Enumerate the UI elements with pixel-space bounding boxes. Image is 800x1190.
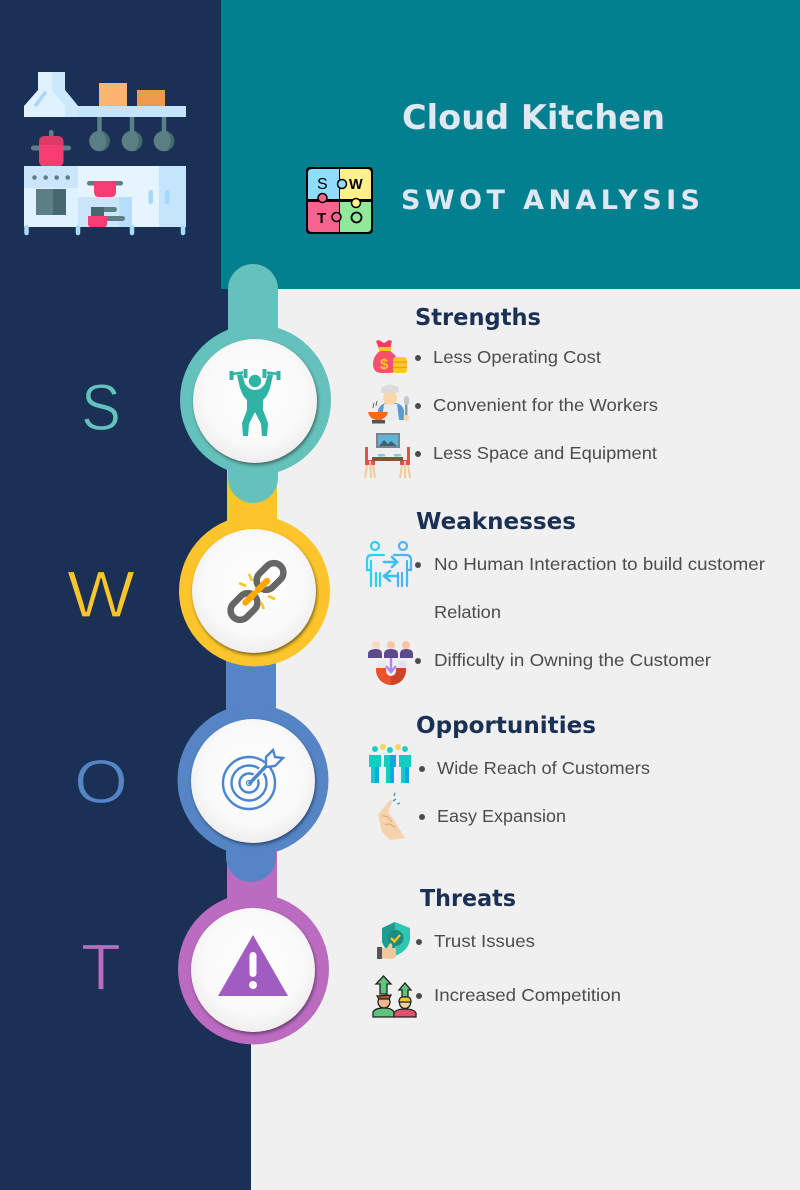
icon: SWOT puzzle: T xyxy=(317,210,326,227)
letter S: S xyxy=(81,370,121,444)
heading: weaknesses: Weaknesses xyxy=(416,509,576,535)
icon: SWOT puzzle: W xyxy=(349,177,363,193)
icon: trust shield xyxy=(377,922,410,959)
heading: opportunities: Opportunities xyxy=(416,713,596,739)
bullet text: increased competition: Increased Competition xyxy=(434,985,621,1005)
title: Cloud Kitchen xyxy=(402,98,665,138)
icon: target with dart xyxy=(223,750,283,809)
bullet text: wide reach: Wide Reach of Customers xyxy=(437,758,650,778)
icon: SWOT puzzle xyxy=(306,167,373,234)
panel: weaknesses xyxy=(367,509,765,685)
panel: opportunities xyxy=(369,713,650,840)
icon: chef xyxy=(368,384,410,424)
bullet text: convenient for the workers: Convenient for the Workers xyxy=(433,395,658,415)
icon: dining table xyxy=(365,433,410,478)
letter T: T xyxy=(81,930,121,1004)
heading: strengths: Strengths xyxy=(415,305,541,331)
panel: strengths xyxy=(365,305,658,478)
subtitle: SWOT ANALYSIS xyxy=(401,185,700,216)
bullet text: easy expansion: Easy Expansion xyxy=(437,806,566,826)
bullet text: trust issues: Trust Issues xyxy=(434,931,535,951)
icon: crowd of customers xyxy=(369,744,411,783)
timeline node: threats xyxy=(178,850,329,1044)
icon: SWOT puzzle: S xyxy=(317,176,328,193)
icon: competitors xyxy=(373,976,416,1017)
icon: money bag: $ xyxy=(380,356,389,373)
icon: finger snap xyxy=(378,793,405,840)
teal header panel xyxy=(221,0,800,289)
icon: warning triangle xyxy=(218,935,288,996)
bullet text: less operating cost: Less Operating Cost xyxy=(433,347,601,367)
icon: customer magnet xyxy=(368,641,413,685)
heading: threats: Threats xyxy=(420,886,516,912)
panel: threats xyxy=(373,886,621,1017)
icon: weightlifter xyxy=(230,369,280,436)
text: relation: Relation xyxy=(434,602,501,622)
letter W: W xyxy=(67,557,136,631)
bullet text: less space and equipment: Less Space and Equipment xyxy=(433,443,657,463)
icon: money bag xyxy=(373,340,407,373)
timeline node: strengths xyxy=(180,264,331,503)
letter O: O xyxy=(74,748,128,817)
bullet text: difficulty owning customer: Difficulty in Owning the Customer xyxy=(434,650,711,670)
bullet text: no human interaction: No Human Interaction to build customer xyxy=(434,554,765,574)
navy side panel xyxy=(0,0,251,1190)
timeline node: weaknesses xyxy=(179,470,330,666)
icon: human interaction xyxy=(367,542,411,586)
timeline node: opportunities xyxy=(178,660,328,882)
icon: kitchen illustration xyxy=(24,72,186,233)
icon: broken chain xyxy=(227,559,287,624)
